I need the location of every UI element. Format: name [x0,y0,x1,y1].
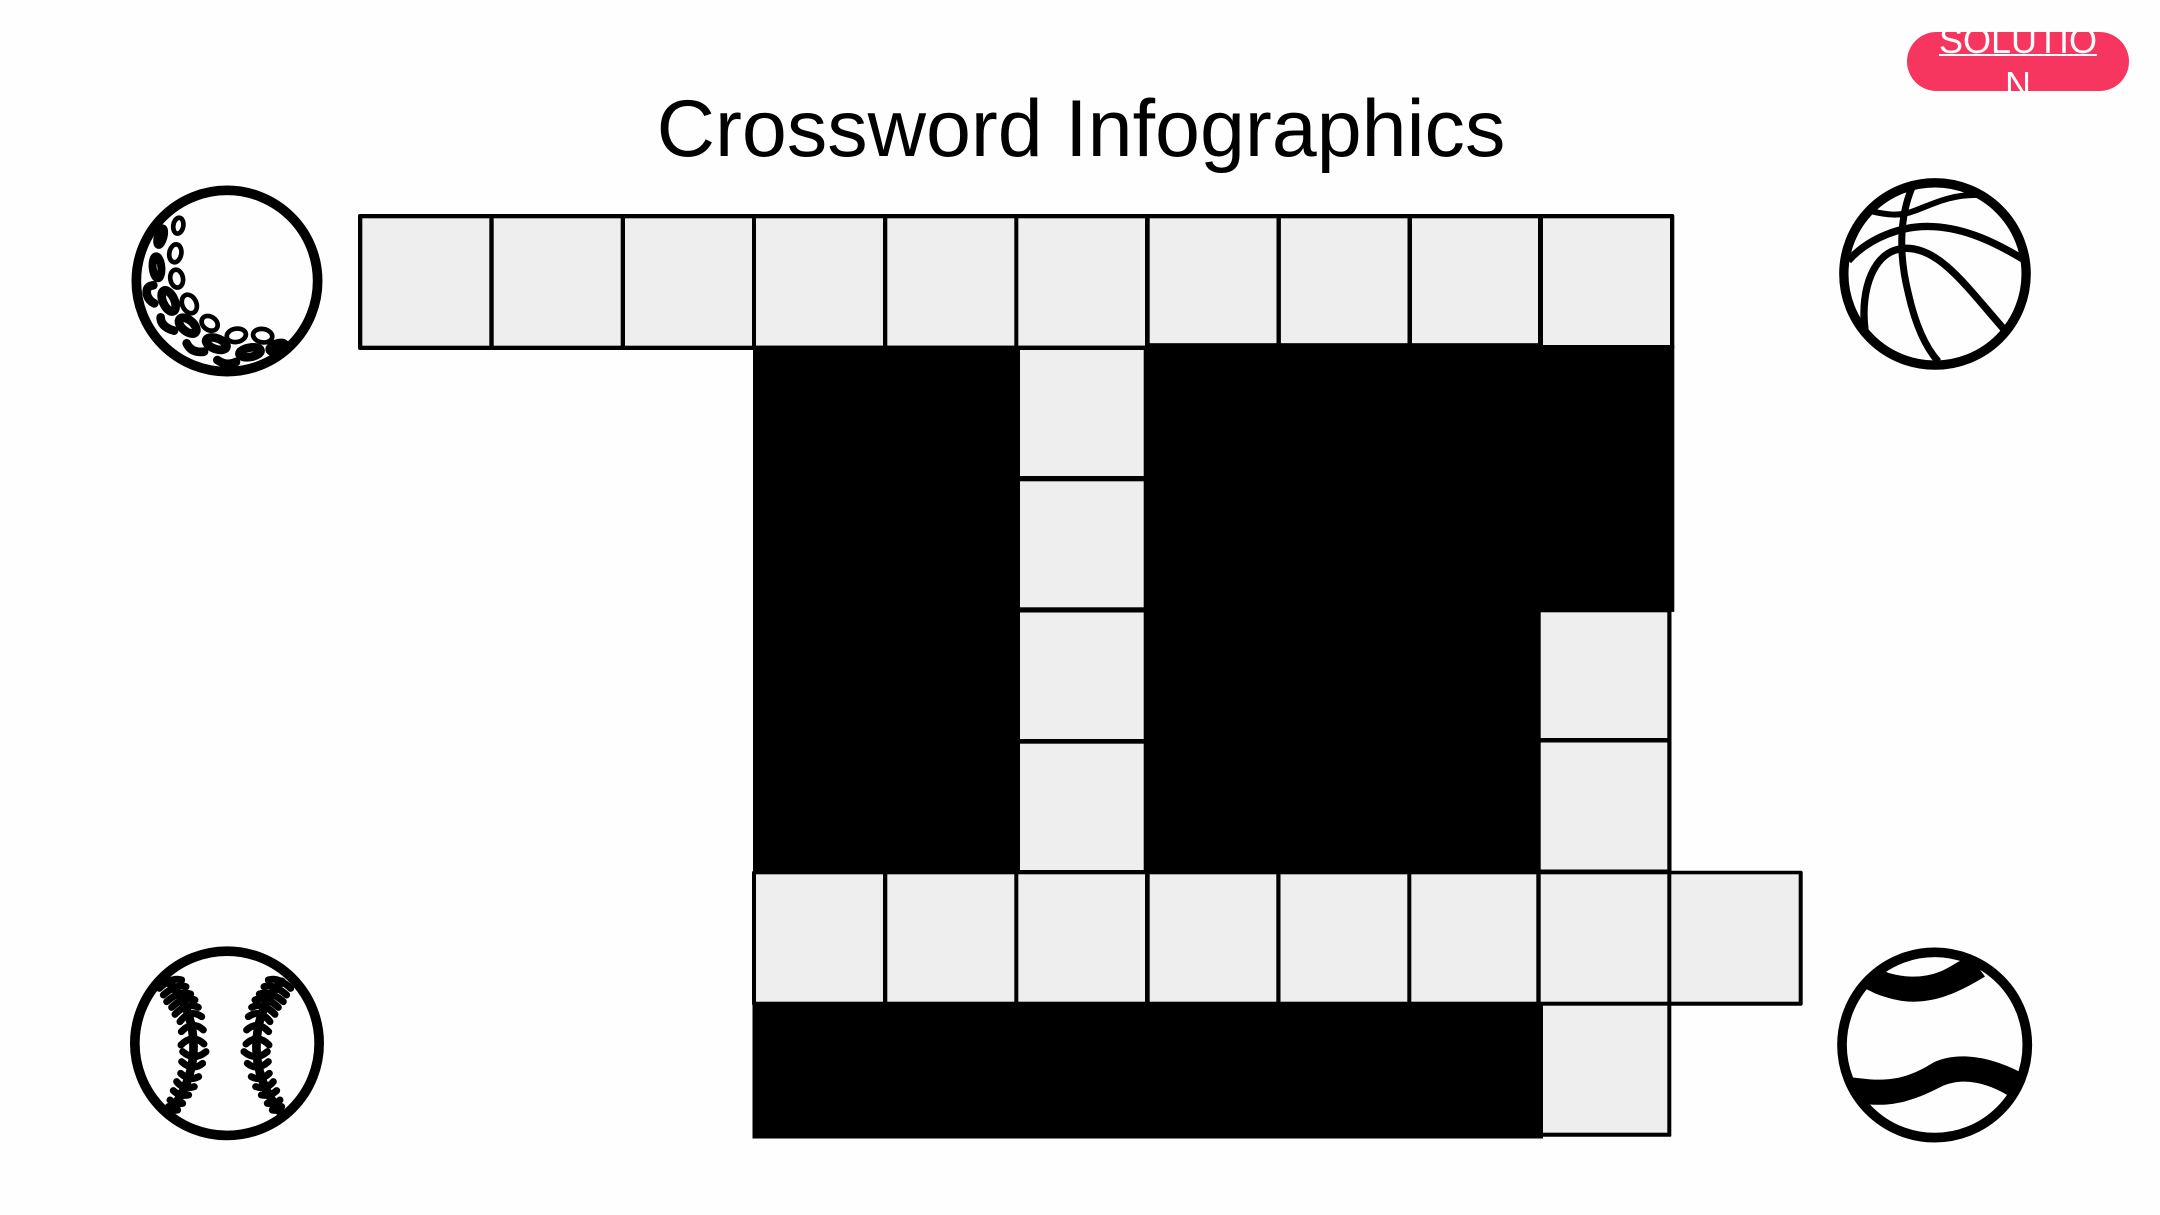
top across row [358,214,1674,350]
right seam [244,979,291,1112]
center down column [1020,350,1144,870]
crossword grid [358,214,1803,1138]
solution button [1907,32,2129,91]
title: Crossword Infographics [657,84,1505,174]
icon: basketball [1844,183,2026,365]
bottom single down cell [1540,1003,1671,1137]
bottom across row [752,871,1803,1006]
icon: tennis ball [1842,952,2027,1138]
right upper down column [1537,610,1672,873]
left seam [159,979,206,1112]
black blocks [752,343,1674,1138]
icon: golf ball [136,190,318,372]
icon: baseball [135,951,319,1135]
